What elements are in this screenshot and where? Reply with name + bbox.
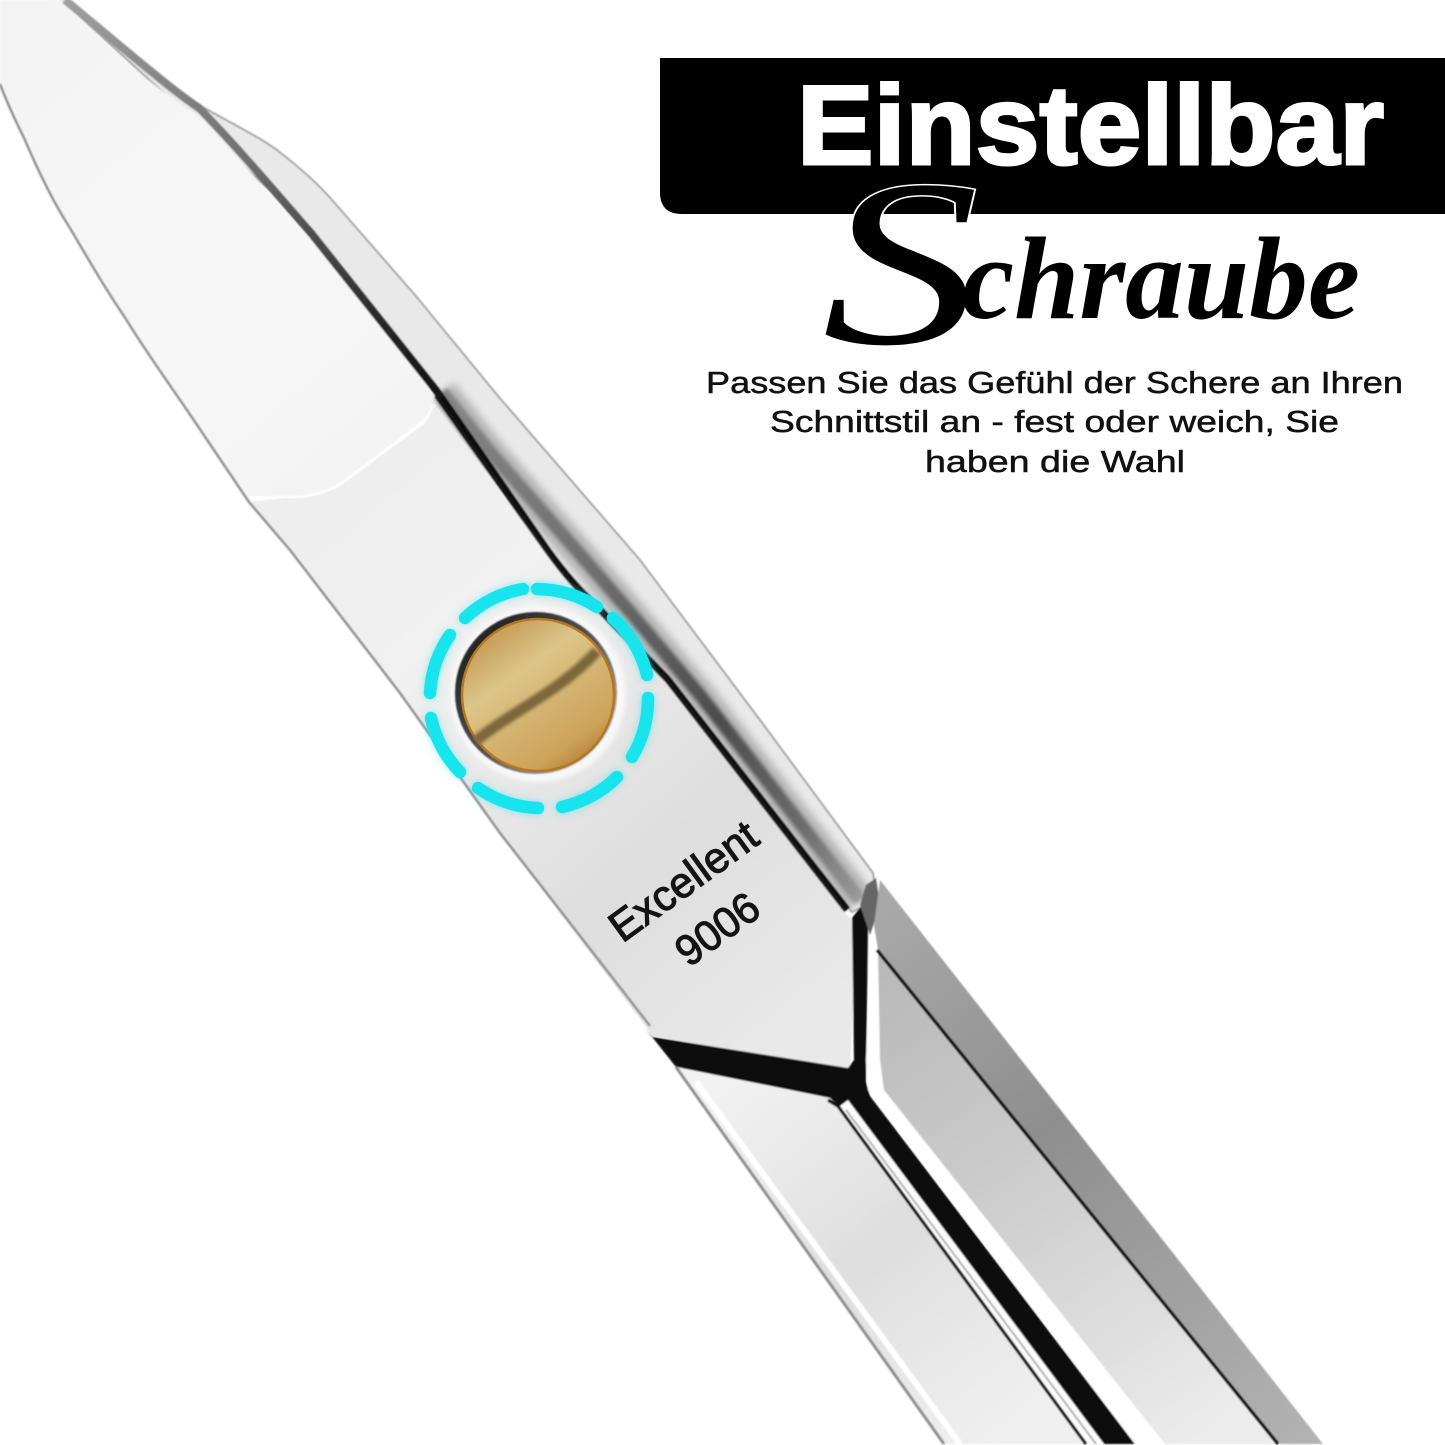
blade tip xyxy=(0,0,433,496)
lower left panel xyxy=(676,1067,1086,1444)
adjustment screw xyxy=(450,606,626,782)
scissors upper outer band xyxy=(62,0,877,912)
white strip beside stripe xyxy=(840,1100,1104,1444)
right gray band xyxy=(874,880,1323,1444)
blade dark spine xyxy=(65,0,847,910)
thin black line lower xyxy=(828,1100,1086,1444)
script subheading: Schraube xyxy=(822,132,1360,395)
description text xyxy=(706,365,1403,479)
spike top xyxy=(860,878,880,935)
gray line in strip xyxy=(846,1110,1096,1444)
heading: Einstellbar: Einstellbar xyxy=(797,63,1384,188)
description text: Passen Sie das Gefühl der Schere an Ihren xyxy=(706,365,1403,400)
title bar xyxy=(660,58,1445,214)
upper gray band halo xyxy=(442,392,860,900)
white sliver xyxy=(866,935,1165,1444)
right panel xyxy=(878,950,1278,1444)
thin black line right xyxy=(877,950,1278,1444)
upper gray band xyxy=(442,392,860,900)
white bright strip xyxy=(696,1082,960,1444)
script subheading: Schraube: S xyxy=(822,132,979,395)
dark junction bar xyxy=(645,905,1135,1444)
dashed cyan highlight ring xyxy=(430,589,648,808)
plate black contour xyxy=(436,396,845,910)
tip boundary highlight xyxy=(290,404,433,497)
description text: Schnittstil an - fest oder weich, Sie xyxy=(770,404,1339,439)
script subheading: Schraube: chraube xyxy=(962,213,1360,344)
engraved text: Excellent 9006: Excellent xyxy=(600,812,767,952)
description text: haben die Wahl xyxy=(925,444,1185,479)
screw plate xyxy=(249,402,858,1070)
engraved text: Excellent 9006: 9006 xyxy=(666,883,769,976)
lower left edge xyxy=(676,1067,944,1444)
left edge contour xyxy=(0,84,650,1026)
